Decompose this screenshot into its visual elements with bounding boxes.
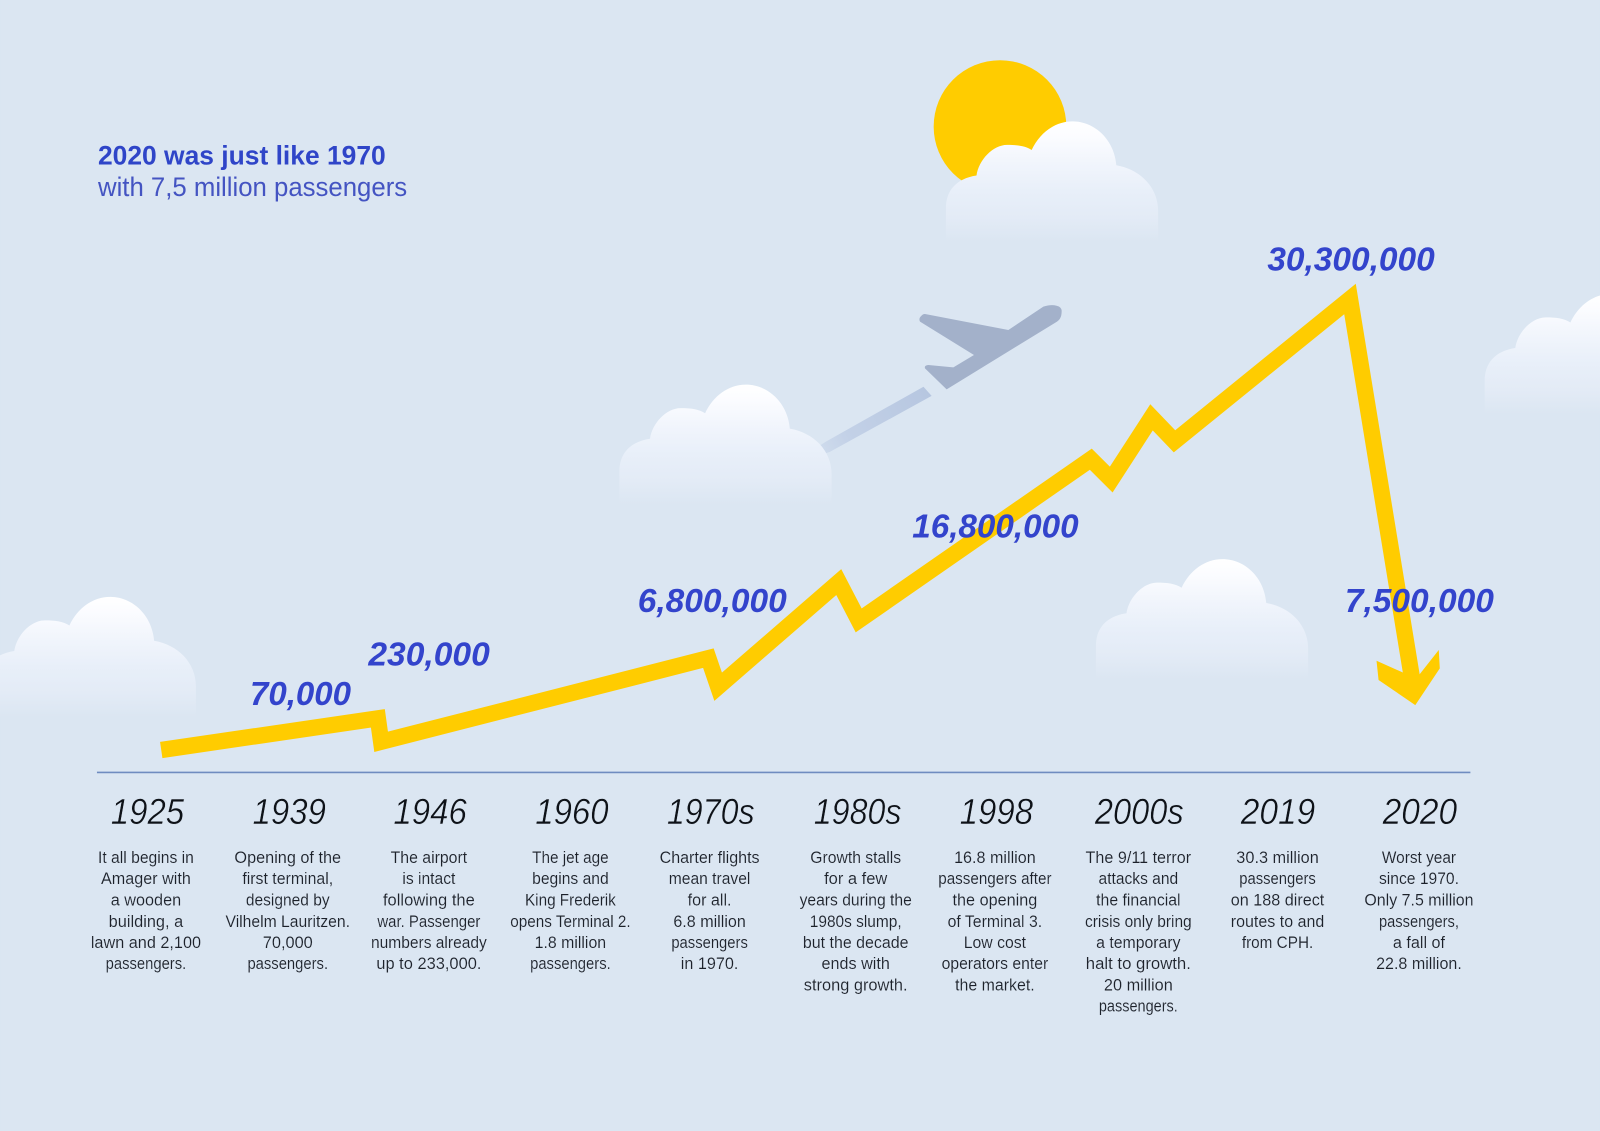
description 1980s: 1980s slump, — [810, 913, 902, 931]
timeline column: 1960 — [510, 792, 631, 973]
description 1998: the market. — [955, 976, 1035, 994]
description 2000s: The 9/11 terror — [1086, 849, 1192, 867]
description 1946: is intact — [402, 870, 456, 888]
year 2020: 2020 — [1382, 792, 1457, 832]
description 1980s: years during the — [800, 892, 912, 910]
description 1939: first terminal, — [242, 870, 333, 888]
description 1980s: Growth stalls — [810, 849, 901, 867]
description 2020: since 1970. — [1379, 870, 1459, 888]
cloud bottom left — [0, 597, 196, 717]
description 1998: of Terminal 3. — [948, 913, 1042, 931]
year 1970s: 1970s — [667, 792, 755, 832]
year 1980s: 1980s — [814, 792, 902, 832]
description 1970s: mean travel — [669, 870, 750, 888]
description 1970s: 6.8 million — [673, 913, 746, 931]
description 2020 — [1364, 849, 1474, 973]
description 2019: on 188 direct — [1231, 892, 1325, 910]
timeline column: 2020 — [1364, 792, 1474, 973]
cloud over sun — [946, 121, 1158, 242]
value: 7,500,000: 7,500,000 — [1345, 583, 1494, 620]
description 2000s: 20 million — [1104, 976, 1173, 994]
value: 6,800,000: 6,800,000 — [638, 583, 787, 620]
year 2000s: 2000s — [1094, 792, 1184, 832]
description 2019: passengers — [1239, 870, 1316, 888]
description 2020: Worst year — [1382, 849, 1457, 867]
description 1925: lawn and 2,100 — [91, 934, 201, 952]
description 1960: opens Terminal 2. — [510, 913, 631, 931]
description 2019: from CPH. — [1242, 934, 1313, 952]
cloud lower right — [1096, 559, 1308, 680]
description 1939: designed by — [246, 892, 330, 910]
description 1939: Vilhelm Lauritzen. — [226, 913, 350, 931]
description 1960: begins and — [532, 870, 609, 888]
title: with 7,5 million passengers — [97, 172, 407, 202]
value: 30,300,000: 30,300,000 — [1267, 241, 1435, 278]
value: 16,800,000: 16,800,000 — [912, 509, 1079, 546]
description 2019: 30.3 million — [1236, 849, 1319, 867]
description 2020: 22.8 million. — [1376, 955, 1462, 973]
passenger line chart — [161, 299, 1440, 750]
timeline column: 1925 — [91, 792, 201, 973]
description 1970s: passengers — [671, 934, 748, 952]
description 1946: up to 233,000. — [376, 955, 481, 973]
description 1960: passengers. — [530, 955, 611, 973]
description 1925 — [91, 849, 201, 973]
cloud far right — [1485, 294, 1600, 414]
description 1960: 1.8 million — [535, 934, 606, 952]
timeline column: 1980s — [800, 792, 912, 994]
description 1998: Low cost — [964, 934, 1026, 952]
description 1946: The airport — [391, 849, 468, 867]
description 1970s: Charter flights — [660, 849, 760, 867]
description 2000s: halt to growth. — [1086, 955, 1191, 973]
description 2000s — [1085, 849, 1192, 1016]
description 2019: routes to and — [1231, 913, 1324, 931]
timeline column: 1946 — [371, 792, 488, 973]
description 1960: King Frederik — [525, 892, 617, 910]
icon: airplane — [919, 305, 1062, 389]
description 1939: passengers. — [247, 955, 328, 973]
icon: sun — [934, 60, 1066, 193]
description 1980s: for a few — [824, 870, 888, 888]
description 1980s: ends with — [822, 955, 890, 973]
title: 2020 was just like 1970 — [98, 140, 386, 170]
description 1925: It all begins in — [98, 849, 194, 867]
contrail — [791, 387, 932, 464]
description 2000s: passengers. — [1099, 998, 1178, 1016]
description 1970s: in 1970. — [681, 955, 738, 973]
timeline column: 1998 — [938, 792, 1052, 994]
description 1925: Amager with — [101, 870, 191, 888]
year 1939: 1939 — [253, 792, 326, 832]
year 1960: 1960 — [535, 792, 609, 832]
description 1980s — [800, 849, 912, 994]
description 1998: operators enter — [942, 955, 1049, 973]
description 1970s — [660, 849, 760, 973]
year 1946: 1946 — [393, 792, 467, 832]
description 1998: 16.8 million — [954, 849, 1036, 867]
description 1998: the opening — [953, 892, 1037, 910]
description 1960 — [510, 849, 631, 973]
description 1946: following the — [383, 892, 475, 910]
value: 70,000: 70,000 — [250, 676, 351, 713]
description 1946 — [371, 849, 488, 973]
description 1946: war. Passenger — [376, 913, 481, 931]
description 2019 — [1231, 849, 1325, 952]
description 1998: passengers after — [938, 870, 1052, 888]
value: 230,000: 230,000 — [367, 636, 490, 673]
timeline column: 2019 — [1231, 792, 1325, 952]
description 2020: passengers, — [1379, 913, 1459, 931]
description 2020: a fall of — [1393, 934, 1445, 952]
description 1980s: but the decade — [803, 934, 909, 952]
description 1946: numbers already — [371, 934, 488, 952]
cloud left of plane — [619, 385, 832, 505]
description 1939: Opening of the — [234, 849, 341, 867]
description 1960: The jet age — [532, 849, 609, 867]
description 2000s: attacks and — [1099, 870, 1178, 888]
timeline column: 1970s — [660, 792, 760, 973]
description 1980s: strong growth. — [804, 976, 908, 994]
title — [97, 140, 407, 202]
description 2020: Only 7.5 million — [1364, 892, 1474, 910]
description 1939 — [226, 849, 350, 973]
description 1939: 70,000 — [263, 934, 313, 952]
description 1925: passengers. — [106, 955, 186, 973]
description 1970s: for all. — [688, 892, 732, 910]
description 1925: a wooden — [111, 892, 181, 910]
arrowhead — [1377, 650, 1440, 705]
year 1998: 1998 — [960, 792, 1033, 832]
description 1925: building, a — [109, 913, 184, 931]
description 2000s: a temporary — [1096, 934, 1181, 952]
timeline axis — [97, 771, 1470, 773]
description 1998 — [938, 849, 1052, 994]
year 1925: 1925 — [111, 792, 184, 832]
description 2000s: the financial — [1096, 892, 1181, 910]
timeline column: 1939 — [226, 792, 350, 973]
year 2019: 2019 — [1240, 792, 1315, 832]
description 2000s: crisis only bring — [1085, 913, 1192, 931]
timeline column: 2000s — [1085, 792, 1192, 1016]
